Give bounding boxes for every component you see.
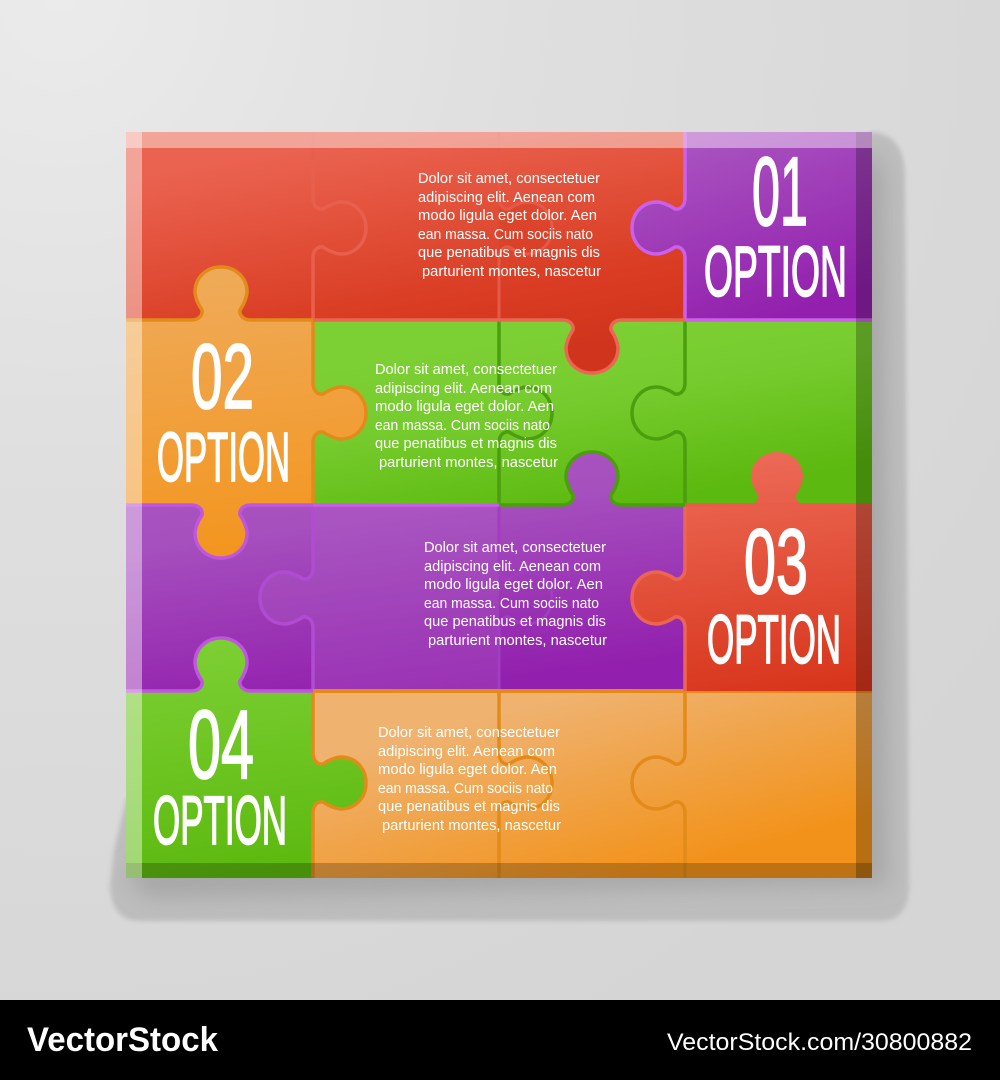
text block: option 03: ean massa. Cum sociis nato [424,596,599,612]
tab: red into green [562,320,622,373]
text block: option 04 [378,725,561,834]
option 01 label: OPTION [704,233,847,312]
option 01 label: 01 [752,137,808,246]
glass edge bands [126,132,872,878]
option 04 label [153,690,287,859]
text block: option 01: parturient montes, nascetur [422,264,601,280]
text block: option 01 [418,171,601,280]
board shadow [110,132,909,921]
text block: option 03: parturient montes, nascetur [428,633,607,649]
text block: option 04: adipiscing elit. Aenean com [378,744,555,760]
text block: option 02: ean massa. Cum sociis nato [375,418,550,434]
piece: 03 red [632,452,872,691]
option 02 label [157,326,290,496]
watermark logo text: VectorStock [27,1021,218,1059]
text block: option 02: que penatibus et magnis dis [375,436,557,452]
text block: option 02: Dolor sit amet, consectetuer [375,362,557,378]
text block: option 02: adipiscing elit. Aenean com [375,381,552,397]
host outlines around interlocking tabs [126,320,872,691]
text block: option 01: adipiscing elit. Aenean com [418,190,595,206]
text block: option 01: ean massa. Cum sociis nato [418,227,593,243]
option 02 label: 02 [191,326,254,428]
option 03 label: OPTION [707,601,841,678]
text block: option 01: modo ligula eget dolor. Aen [418,208,597,224]
option 03 label [707,511,841,678]
text block: option 02: parturient montes, nascetur [379,455,558,471]
option 01 label [704,137,847,312]
text: OPTION [157,418,290,496]
text block: option 04: ean massa. Cum sociis nato [378,781,553,797]
text block: option 04: Dolor sit amet, consectetuer [378,725,560,741]
piece: purple third row [126,452,685,691]
option 03 label: 03 [744,511,808,613]
text block: option 01: Dolor sit amet, consectetuer [418,171,600,187]
piece: 04 green [126,638,366,878]
option 04 label: 04 [188,690,254,799]
text block: option 03: modo ligula eget dolor. Aen [424,577,603,593]
piece: orange fourth row [313,691,872,878]
piece: 01 purple [632,132,872,320]
text block: option 03: adipiscing elit. Aenean com [424,559,601,575]
piece: green second row [313,320,872,505]
text block: option 04: que penatibus et magnis dis [378,799,560,815]
piece: red top row [126,132,685,320]
text block: option 03 [424,540,607,649]
option 04 label: OPTION [153,782,287,859]
footer watermark bar [0,1000,1000,1080]
text block: option 02 [375,362,558,471]
puzzle board [126,132,872,878]
watermark url text: VectorStock.com/30800882 [667,1029,972,1056]
text block: option 03: que penatibus et magnis dis [424,614,606,630]
text block: option 04: parturient montes, nascetur [382,818,561,834]
text block: option 02: modo ligula eget dolor. Aen [375,399,554,415]
piece: 02 orange [126,267,366,558]
text block: option 01: que penatibus et magnis dis [418,245,600,261]
text block: option 03: Dolor sit amet, consectetuer [424,540,606,556]
text block: option 04: modo ligula eget dolor. Aen [378,762,557,778]
